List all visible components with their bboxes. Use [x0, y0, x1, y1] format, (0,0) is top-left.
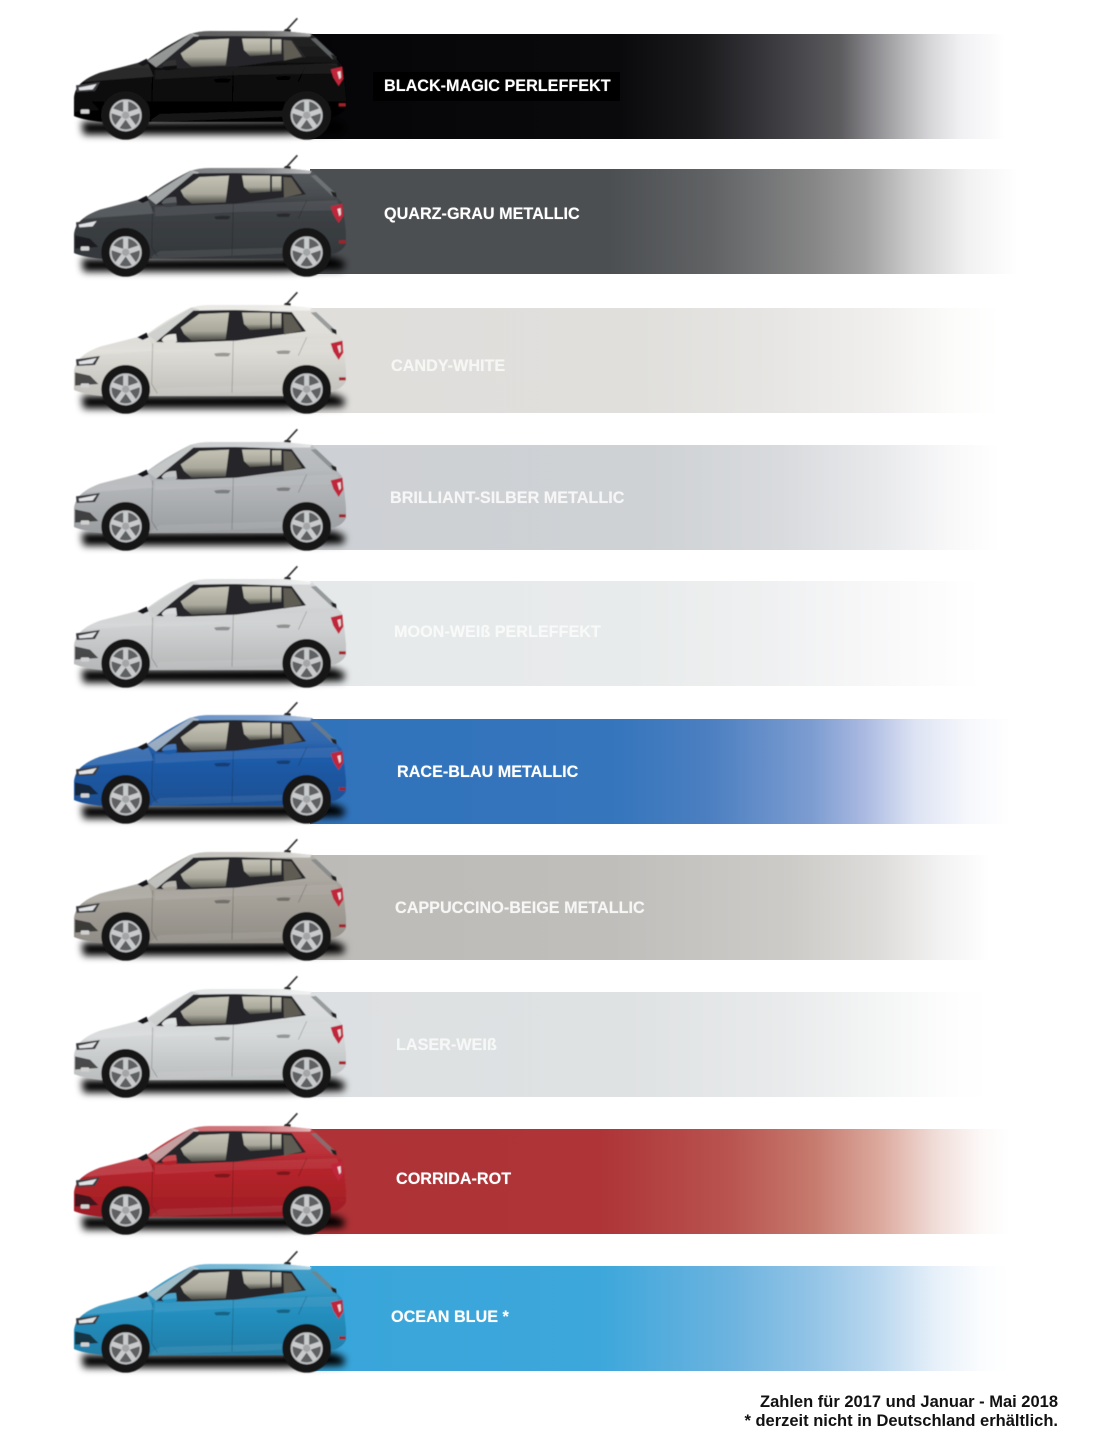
- label: LASER-WEIß: [396, 1036, 497, 1054]
- label: CAPPUCCINO-BEIGE METALLIC: [395, 899, 645, 917]
- car: [74, 291, 350, 415]
- label: BRILLIANT-SILBER METALLIC: [390, 489, 624, 507]
- colour band: [310, 34, 1030, 138]
- colour band: [310, 1266, 1030, 1370]
- row: Black-Magic Perleffekt: [73, 17, 982, 141]
- label: BLACK-MAGIC PERLEFFEKT: [384, 77, 611, 95]
- footnote: [744, 1393, 1058, 1430]
- car: [74, 428, 350, 552]
- car: [73, 17, 346, 141]
- car: [73, 1112, 350, 1236]
- label: CANDY-WHITE: [391, 357, 505, 375]
- car: [73, 154, 348, 278]
- colour band: [310, 169, 1030, 274]
- colour band: [310, 855, 1030, 960]
- car: [73, 1250, 350, 1374]
- colour band: [310, 1129, 1030, 1234]
- label box: [373, 72, 620, 101]
- row: Ocean Blue: [73, 1250, 972, 1374]
- colour band: [310, 992, 1030, 1096]
- car: [74, 975, 350, 1099]
- colour band: [310, 445, 1030, 550]
- label: RACE-BLAU METALLIC: [397, 763, 578, 781]
- row: Corrida-Rot: [73, 1112, 980, 1236]
- colour band: [310, 581, 1030, 686]
- row: Quarz-Grau Metallic: [73, 154, 988, 278]
- car: [74, 565, 350, 689]
- footnote: * derzeit nicht in Deutschland erhältlich.: [744, 1412, 1058, 1430]
- row: Brilliant-Silber Metallic: [74, 428, 946, 552]
- label: CORRIDA-ROT: [396, 1170, 511, 1188]
- label: QUARZ-GRAU METALLIC: [384, 205, 580, 223]
- row: Cappuccino-Beige Metallic: [73, 838, 958, 962]
- row: Laser-Weiß: [74, 975, 902, 1099]
- colour band: [310, 308, 1030, 412]
- row: Race-Blau Metallic: [73, 701, 972, 825]
- label: OCEAN BLUE *: [391, 1308, 509, 1326]
- row: Candy-White: [74, 291, 932, 415]
- label: MOON-WEIß PERLEFFEKT: [394, 623, 601, 641]
- car: [73, 838, 350, 962]
- footnote: Zahlen für 2017 und Januar - Mai 2018: [760, 1393, 1058, 1411]
- colour band: [310, 719, 1030, 824]
- row: Moon-Weiß Perleffekt: [74, 565, 866, 689]
- car: [73, 701, 350, 825]
